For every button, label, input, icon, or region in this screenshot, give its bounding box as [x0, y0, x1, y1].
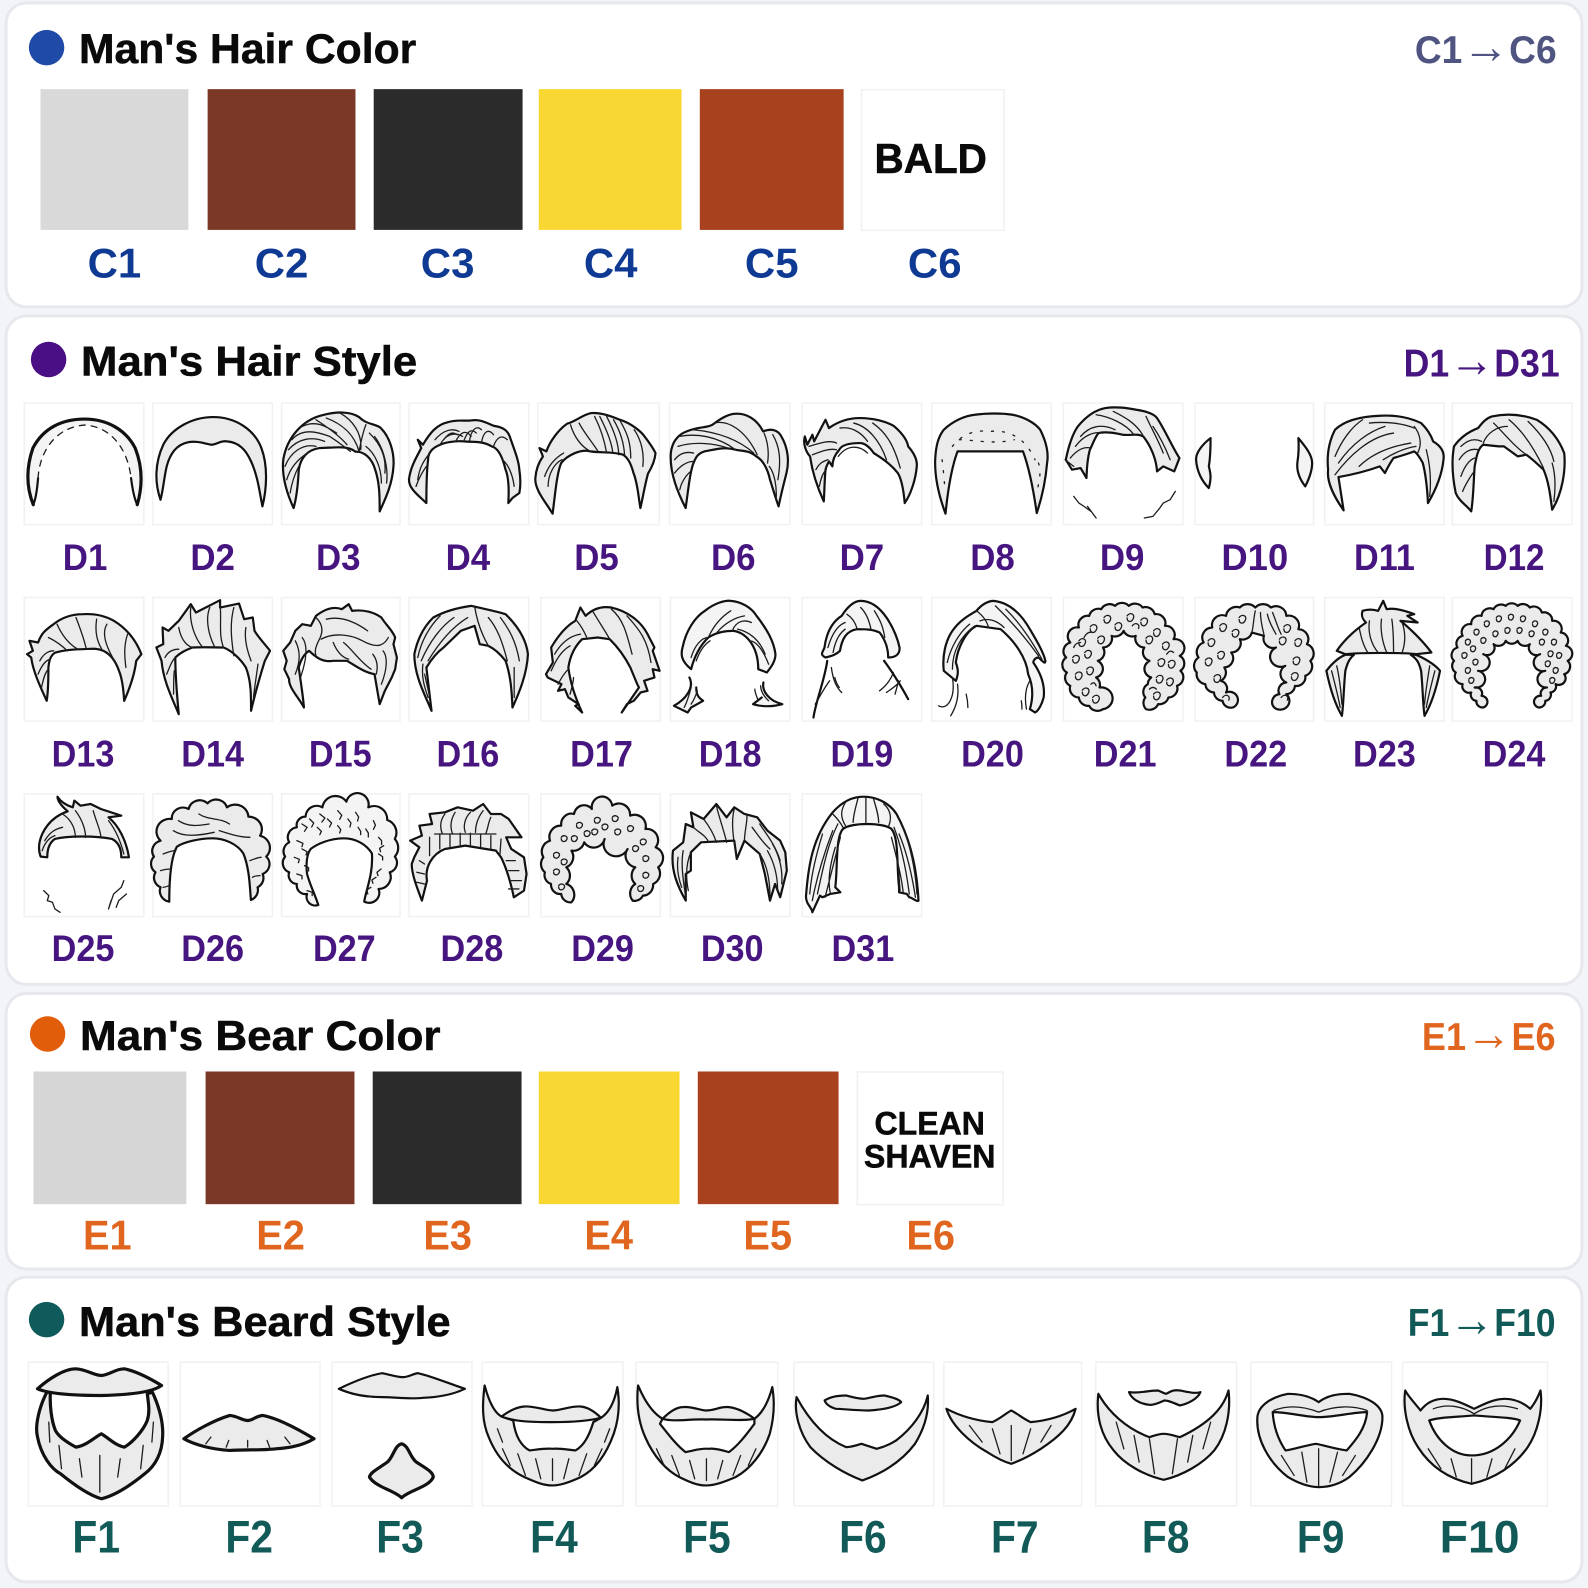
hair style D25	[24, 794, 144, 969]
hair style D9	[1063, 403, 1183, 578]
hair style D3	[282, 403, 400, 578]
label: D19: D19	[830, 733, 893, 775]
label: D17: D17	[570, 733, 633, 775]
swatch C6 bald: BALD	[875, 135, 987, 182]
beard style F6	[794, 1362, 934, 1563]
label: D16: D16	[436, 733, 499, 775]
label: D2: D2	[190, 536, 235, 578]
icon: F2 mustache	[184, 1415, 314, 1450]
icon: D5 tousled quiff	[535, 413, 656, 514]
label: F1: F1	[72, 1512, 120, 1563]
icon: D13 tapered quiff	[27, 614, 141, 701]
label: F10: F10	[1440, 1512, 1520, 1563]
icon: D20 long swept	[939, 601, 1045, 716]
icon: F6 chin strap with mustache	[796, 1395, 928, 1480]
label: F3: F3	[376, 1512, 424, 1563]
swatch E5 auburn	[698, 1071, 839, 1259]
heading dot: orange	[30, 1016, 65, 1052]
beard style F5	[636, 1362, 778, 1563]
hair style D6	[669, 403, 790, 578]
label: D27: D27	[313, 927, 376, 969]
heading dot: teal	[29, 1302, 64, 1337]
beard style F7	[944, 1362, 1082, 1563]
icon: D26 wavy short	[151, 800, 270, 902]
heading: Man's Hair Color: Man's Hair Color	[79, 25, 416, 72]
swatch E1 grey	[33, 1071, 186, 1259]
label: D25: D25	[52, 927, 114, 969]
label: D13: D13	[52, 733, 114, 775]
hair style D12	[1452, 403, 1572, 578]
hair style D29	[541, 794, 663, 969]
swatch E2 brown	[206, 1071, 354, 1259]
icon: D2 receding crown	[156, 417, 266, 506]
hair style D11	[1325, 403, 1444, 578]
icon: F1 full beard	[37, 1369, 163, 1499]
beard style F3	[332, 1362, 472, 1563]
icon: D4 short wave	[409, 420, 520, 503]
icon: D18 side part long	[674, 601, 782, 712]
heading: Man's Hair Style: Man's Hair Style	[81, 338, 417, 385]
swatch C2 brown: C2	[255, 239, 308, 286]
label: D29: D29	[571, 927, 634, 969]
icon: D14 spiked up	[156, 600, 270, 714]
heading dot: purple	[31, 342, 66, 377]
hair style D15	[282, 598, 400, 775]
label: D20: D20	[961, 733, 1024, 775]
hair style D19	[802, 598, 922, 775]
icon: F9 heart shaped goatee	[1257, 1394, 1382, 1487]
icon: F3 mustache and soul patch	[339, 1373, 465, 1498]
range tag: F1 to F10: F1→F10	[1408, 1293, 1556, 1347]
swatch C3 black: C3	[421, 239, 474, 286]
hair style D13	[24, 598, 144, 775]
range tag: D1 to D31: D1→D31	[1404, 334, 1560, 388]
swatch C4 blonde	[539, 89, 682, 286]
hair style D21	[1062, 598, 1184, 775]
label: D10: D10	[1221, 536, 1288, 578]
hair style D30	[670, 794, 790, 969]
icon: F7 pointed chin beard	[946, 1409, 1076, 1464]
beard style F8	[1096, 1362, 1237, 1563]
icon: D31 long straight locks	[806, 797, 918, 912]
label: F7: F7	[991, 1512, 1039, 1563]
beard style F10	[1403, 1362, 1547, 1563]
icon: D21 loose curls	[1062, 603, 1184, 711]
hair style D2	[153, 403, 272, 578]
panel: man's beard style	[6, 1277, 1582, 1582]
swatch C1 grey: C1	[88, 239, 141, 286]
swatch E1 grey: E1	[83, 1212, 132, 1259]
panel: man's hair color	[6, 3, 1582, 307]
swatch E3 black: E3	[423, 1212, 472, 1259]
label: D6: D6	[711, 536, 756, 578]
icon: D11 long side part	[1328, 416, 1444, 510]
swatch E6 clean shaven: SHAVEN	[864, 1139, 996, 1175]
label: D4: D4	[446, 536, 490, 578]
label: D21: D21	[1094, 733, 1157, 775]
swatch E6 clean shaven: E6	[906, 1212, 955, 1259]
swatch C1 grey	[41, 89, 188, 286]
icon: F10 horned full circle beard	[1405, 1390, 1541, 1484]
panel: man's hair style	[6, 316, 1582, 984]
hair style D26	[151, 794, 272, 969]
swatch E4 blonde: E4	[584, 1212, 633, 1259]
icon: D10 sideburns only	[1196, 438, 1312, 488]
label: D1: D1	[63, 536, 107, 578]
swatch E2 brown: E2	[256, 1212, 305, 1259]
swatch E6 clean shaven: CLEAN	[875, 1105, 985, 1141]
icon: F4 full beard with mustache	[483, 1385, 619, 1485]
hair style D5	[535, 403, 659, 578]
hair style D10	[1195, 403, 1314, 578]
label: F8: F8	[1142, 1512, 1189, 1563]
icon: D28 braided twists	[410, 804, 527, 901]
icon: D29 small curls afro	[541, 797, 663, 902]
label: F6: F6	[839, 1512, 887, 1563]
icon: D25 tousled top with wisps	[39, 797, 129, 912]
hair style D18	[670, 598, 790, 775]
hair style D28	[409, 794, 529, 969]
label: D9: D9	[1100, 536, 1144, 578]
swatch C5 auburn: C5	[745, 239, 799, 286]
icon: D22 ringlets	[1194, 604, 1314, 710]
icon: D27 fine afro	[283, 793, 398, 906]
icon: D8 crew cut	[935, 413, 1048, 514]
swatch C5 auburn	[700, 89, 844, 286]
hair style D20	[932, 598, 1051, 775]
hair style D1	[24, 403, 144, 578]
icon: D1 buzz outline	[28, 419, 141, 505]
beard style F9	[1251, 1362, 1392, 1563]
range tag: E1 to E6: E1→E6	[1422, 1007, 1556, 1061]
hair style D22	[1194, 598, 1314, 775]
icon: D17 wavy shag	[546, 607, 660, 712]
icon: D9 mid wave with lower wisps	[1065, 407, 1179, 518]
hair style D14	[153, 598, 272, 775]
label: D30: D30	[701, 927, 764, 969]
label: D24: D24	[1483, 733, 1546, 775]
label: D18: D18	[699, 733, 762, 775]
swatch C6 bald: C6	[908, 239, 962, 286]
label: D11: D11	[1354, 536, 1415, 578]
hair style D24	[1452, 598, 1572, 775]
label: D26: D26	[181, 927, 244, 969]
hair style D8	[932, 403, 1051, 578]
swatch C4 blonde: C4	[584, 239, 638, 286]
icon: D15 textured mop	[283, 604, 397, 707]
label: F4: F4	[530, 1512, 578, 1563]
beard style F2	[180, 1362, 320, 1563]
hair style D27	[282, 793, 400, 969]
hair style D16	[409, 598, 529, 775]
hair style D31	[802, 794, 922, 969]
label: D22: D22	[1224, 733, 1287, 775]
icon: D30 spiky dreads	[672, 804, 787, 901]
swatch C3 black	[374, 89, 523, 286]
icon: D12 side fringe	[1453, 415, 1565, 511]
swatch C2 brown	[208, 89, 355, 286]
icon: D7 flicked fringe	[804, 418, 917, 503]
icon: F5 wide mouth beard	[637, 1385, 774, 1485]
label: D23: D23	[1353, 733, 1416, 775]
hair style D4	[409, 403, 529, 578]
beard style F1	[28, 1362, 168, 1563]
swatch C6 bald	[861, 90, 1004, 286]
label: D7: D7	[840, 536, 884, 578]
range tag: C1 to C6: C1→C6	[1415, 20, 1557, 74]
swatch E4 blonde	[539, 1071, 680, 1259]
icon: D19 long straight	[813, 601, 908, 717]
swatch E6 clean shaven	[857, 1072, 1003, 1259]
label: D5: D5	[574, 536, 619, 578]
label: D3: D3	[316, 536, 361, 578]
hair style D7	[802, 403, 922, 578]
icon: D24 tight coils	[1452, 603, 1572, 708]
label: D15: D15	[309, 733, 372, 775]
heading: Man's Beard Style: Man's Beard Style	[79, 1298, 451, 1345]
icon: D3 side swept wave	[283, 413, 394, 511]
hair style D17	[541, 598, 660, 775]
label: D8: D8	[970, 536, 1015, 578]
label: D31: D31	[831, 927, 894, 969]
swatch E3 black	[373, 1071, 522, 1259]
icon: D6 pompadour	[671, 414, 788, 508]
icon: F8 curved beard with handlebar	[1098, 1390, 1229, 1480]
swatch E5 auburn: E5	[743, 1212, 792, 1259]
hair style D23	[1325, 598, 1444, 775]
icon: D23 top knot	[1326, 601, 1440, 716]
label: D12: D12	[1484, 536, 1544, 578]
beard style F4	[482, 1362, 623, 1563]
icon: D16 curtain fringe	[414, 606, 528, 711]
label: F2: F2	[225, 1512, 273, 1563]
heading dot: blue	[29, 30, 64, 65]
label: F9: F9	[1297, 1512, 1344, 1563]
heading: Man's Bear Color: Man's Bear Color	[80, 1012, 441, 1059]
label: D28: D28	[441, 927, 503, 969]
label: D14: D14	[181, 733, 244, 775]
panel: man's beard color	[6, 994, 1582, 1269]
label: F5: F5	[683, 1512, 731, 1563]
